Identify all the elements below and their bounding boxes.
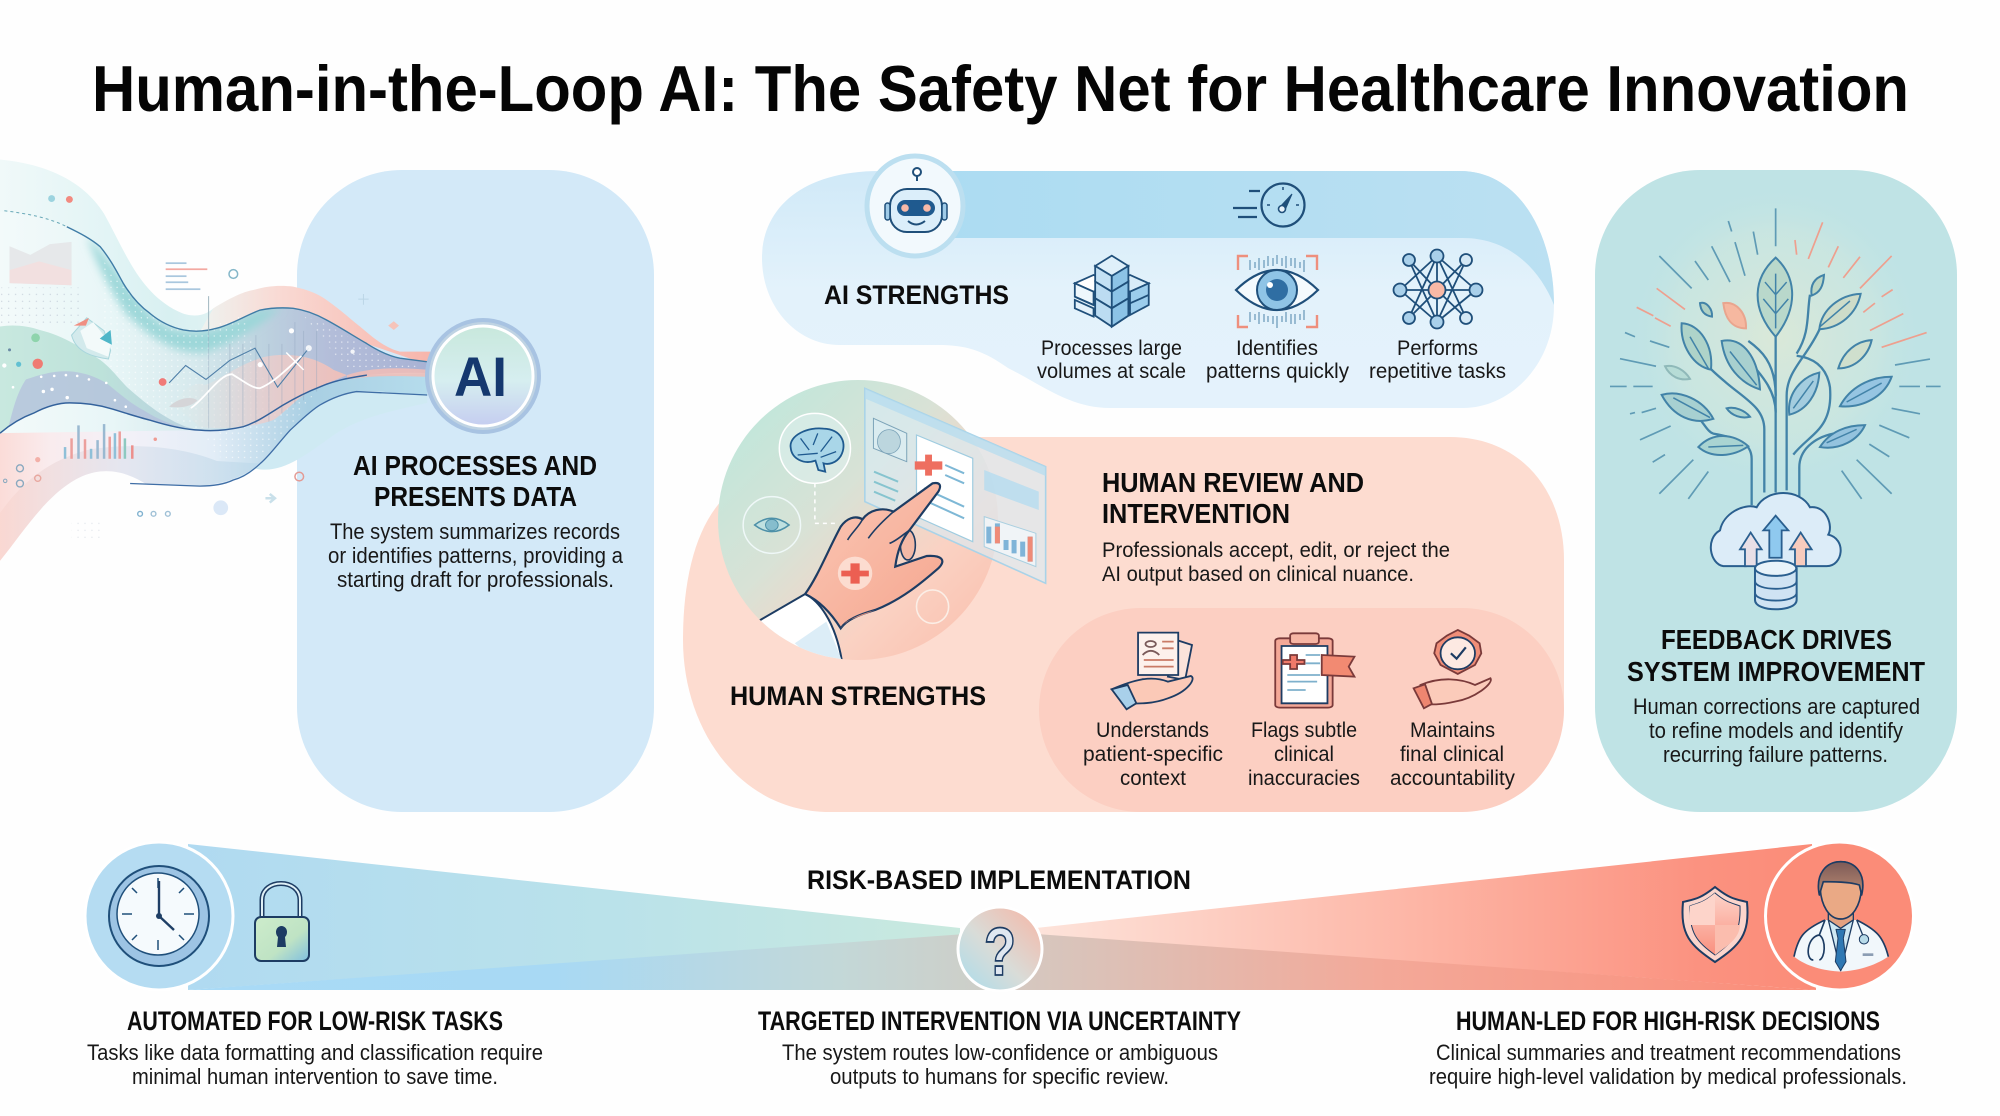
heading: feedback drives system improvement: SYSTEM IMPROVEMENT <box>1627 656 1925 687</box>
heading: risk-based implementation: RISK-BASED IMPLEMENTATION <box>807 865 1191 895</box>
icon: accountability badge in hand <box>1414 630 1491 708</box>
heading: feedback drives system improvement <box>1627 624 1925 687</box>
heading: human strengths: HUMAN STRENGTHS <box>730 681 986 711</box>
text: human-led description: require high-level validation by medical professionals. <box>1429 1064 1907 1089</box>
label: performs repetitive tasks <box>1369 336 1506 383</box>
text: feedback description: recurring failure patterns. <box>1663 742 1888 767</box>
text: automated description: Tasks like data formatting and classification require <box>87 1040 543 1065</box>
label: performs repetitive tasks: repetitive tasks <box>1369 359 1506 383</box>
label: flags inaccuracies <box>1248 718 1360 790</box>
heading: human review and intervention: INTERVENTION <box>1102 498 1290 529</box>
label: identifies patterns: patterns quickly <box>1206 359 1349 383</box>
panel: human review and strengths <box>683 380 1564 812</box>
icon: growing tree from data cloud <box>1610 185 1941 609</box>
label: maintains accountability: accountability <box>1390 766 1515 790</box>
text: human review description: AI output based on clinical nuance. <box>1102 562 1414 586</box>
icon: clipboard with flag <box>1275 633 1354 708</box>
panel: feedback drives system improvement <box>1595 170 1957 812</box>
heading: automated for low-risk tasks: AUTOMATED FOR LOW-RISK TASKS <box>127 1006 503 1036</box>
marker: high-risk doctor <box>1766 842 1914 990</box>
marker: low-risk clock <box>85 842 233 990</box>
illustration: hand reviewing AI output <box>718 380 1046 670</box>
text: AI processes description <box>328 519 624 592</box>
icon: padlock <box>255 884 309 961</box>
heading: AI strengths: AI STRENGTHS <box>824 280 1009 310</box>
text: AI processes description: starting draft for professionals. <box>337 567 614 592</box>
heading: human-led for high-risk decisions: HUMAN-LED FOR HIGH-RISK DECISIONS <box>1456 1006 1880 1036</box>
label: understands context: context <box>1120 766 1186 790</box>
illustration: data stream flowing into AI <box>0 160 430 561</box>
label: identifies patterns <box>1206 336 1349 383</box>
text: AI processes description: The system summarizes records <box>330 519 620 544</box>
heading: feedback drives system improvement: FEEDBACK DRIVES <box>1661 624 1892 655</box>
panel: human strengths list <box>1039 608 1564 812</box>
label: understands context: patient-specific <box>1083 742 1223 766</box>
icon: patient record in hand <box>1112 633 1193 709</box>
text: human-led description: Clinical summaries and treatment recommendations <box>1436 1040 1901 1065</box>
heading: human review and intervention: HUMAN REVIEW AND <box>1102 467 1364 498</box>
label: understands context <box>1083 718 1223 790</box>
band: AI strengths header <box>940 171 1554 305</box>
chart: risk-based implementation spectrum <box>85 842 1914 991</box>
text: automated description: minimal human intervention to save time. <box>132 1064 498 1089</box>
marker: uncertainty question <box>958 907 1042 991</box>
label: maintains accountability: final clinical <box>1400 742 1504 766</box>
label: understands context: Understands <box>1096 718 1209 742</box>
text: feedback description: Human corrections are captured <box>1633 694 1920 719</box>
label: processes large volumes: volumes at scale <box>1037 359 1186 383</box>
icon: AI badge <box>427 320 539 432</box>
panel: AI processes and presents data <box>297 170 654 812</box>
label: processes large volumes: Processes large <box>1041 336 1182 360</box>
heading: AI processes and presents data <box>353 450 597 512</box>
heading: human review and intervention <box>1102 467 1364 529</box>
text: targeted description: The system routes low-confidence or ambiguous <box>782 1040 1218 1065</box>
icon: shield <box>1682 887 1748 962</box>
icon: speed gauge <box>1233 184 1304 226</box>
text: feedback description: to refine models and identify <box>1649 718 1903 743</box>
label: performs repetitive tasks: Performs <box>1397 336 1478 360</box>
icon: robot <box>867 156 963 256</box>
text: targeted description: outputs to humans for specific review. <box>830 1064 1169 1089</box>
text: targeted description <box>782 1040 1218 1089</box>
label: flags inaccuracies: clinical <box>1274 742 1334 766</box>
heading: targeted intervention via uncertainty: TARGETED INTERVENTION VIA UNCERTAINTY <box>758 1006 1241 1036</box>
icon: neural network <box>1394 250 1482 328</box>
label: maintains accountability <box>1390 718 1515 790</box>
text: automated description <box>87 1040 543 1089</box>
label: identifies patterns: Identifies <box>1236 336 1318 360</box>
icon: AI badge: AI <box>454 345 507 408</box>
panel: AI strengths <box>762 156 1554 408</box>
icon: data stacks <box>1075 256 1149 327</box>
icon: eye scan <box>1236 255 1318 328</box>
text: human-led description <box>1429 1040 1907 1089</box>
label: flags inaccuracies: Flags subtle <box>1251 718 1357 742</box>
heading: AI processes and presents data: AI PROCESSES AND <box>353 450 597 481</box>
label: maintains accountability: Maintains <box>1410 718 1495 742</box>
label: processes large volumes <box>1037 336 1186 383</box>
label: flags inaccuracies: inaccuracies <box>1248 766 1360 790</box>
text: feedback description <box>1633 694 1920 767</box>
marker: uncertainty question: ? <box>984 914 1016 990</box>
text: human review description <box>1102 538 1450 586</box>
text: AI processes description: or identifies patterns, providing a <box>328 543 624 568</box>
text: human review description: Professionals accept, edit, or reject the <box>1102 538 1450 562</box>
heading: AI processes and presents data: PRESENTS DATA <box>374 481 577 512</box>
